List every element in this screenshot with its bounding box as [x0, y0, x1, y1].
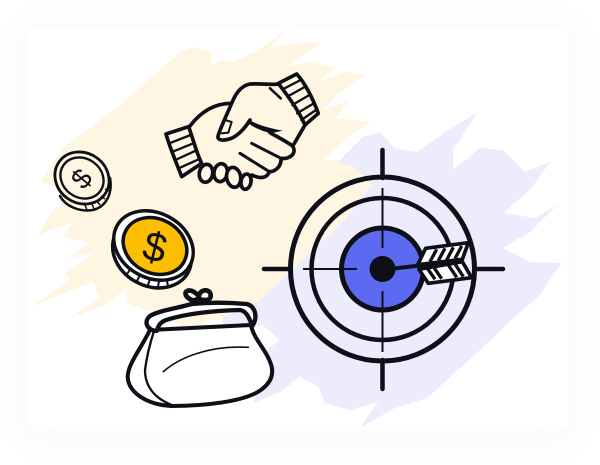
arrow [395, 243, 472, 283]
lavender brush stroke [217, 113, 562, 428]
small coin rim [60, 178, 111, 210]
small coin dollar sign: $ [65, 162, 99, 195]
upper hand outline [218, 84, 278, 140]
arrow shaft [395, 261, 462, 268]
small coin [45, 141, 119, 215]
center dot [370, 256, 396, 282]
gold coin center [113, 207, 197, 285]
left cuff outline [166, 127, 202, 177]
small coin edge ticks [85, 189, 109, 210]
inner crosshair lines [303, 188, 382, 352]
handshake wedge [249, 119, 283, 133]
left cuff [166, 127, 202, 177]
purse clasp knob [186, 290, 211, 301]
small coin inner ring [52, 149, 112, 207]
finger three [225, 166, 242, 188]
finger four [240, 173, 252, 190]
blue bullseye [342, 228, 424, 310]
purse frame [147, 303, 255, 331]
small coin face [45, 141, 119, 215]
purse inner line [145, 330, 172, 405]
right cuff outline [278, 74, 318, 125]
purse crease [163, 347, 248, 372]
gold coin [100, 197, 205, 301]
lower fletching [419, 262, 472, 283]
upper hand fill [218, 84, 305, 175]
lower hand back line [190, 103, 232, 126]
upper hand fingertips [252, 133, 294, 178]
outer ring [290, 177, 474, 361]
cream brush stroke [30, 28, 380, 343]
purse body [128, 325, 272, 406]
upper fletching [418, 243, 468, 265]
finger lines [240, 143, 281, 172]
finger one [198, 163, 214, 183]
fingers [198, 163, 252, 190]
handshake [166, 74, 318, 190]
lower fletching stripes [427, 264, 463, 279]
left cuff ribs [169, 135, 199, 168]
right cuff ribs [283, 80, 316, 120]
right cuff [278, 74, 318, 125]
target [264, 150, 503, 389]
wrist underside [294, 125, 305, 144]
gold coin rim [100, 205, 204, 301]
inner wrist line [270, 88, 281, 98]
upper fletching stripes [430, 246, 462, 262]
gold coin dollar sign: $ [138, 222, 172, 272]
card background [28, 26, 568, 431]
thumbnail [222, 120, 232, 133]
outer crosshair ticks [264, 150, 503, 389]
middle ring [312, 198, 454, 340]
gold coin edge ticks [127, 268, 168, 287]
purse [128, 290, 272, 406]
finger two [213, 163, 229, 183]
gold coin face [102, 197, 205, 294]
